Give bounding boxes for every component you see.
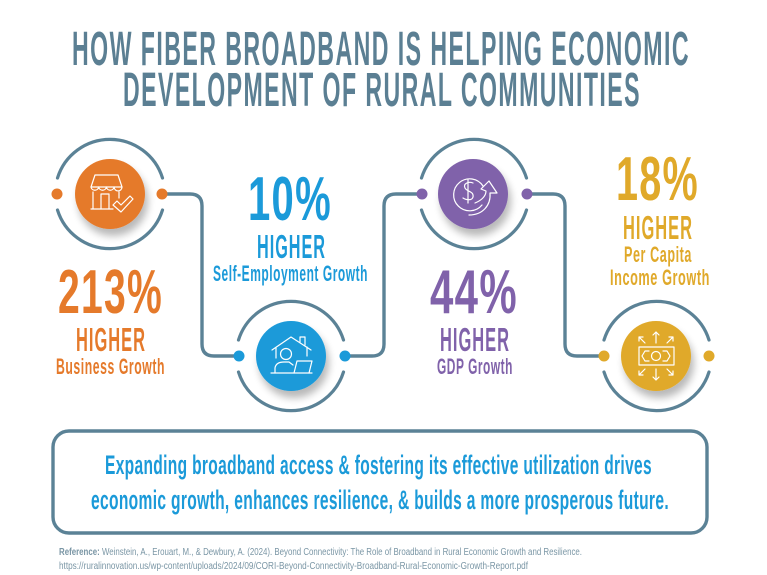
icon: person with laptop at home — [271, 337, 312, 373]
icon: banknote with outward arrows — [639, 332, 674, 380]
step 2: self-employment badge — [234, 301, 350, 411]
stat: 44% GDP growth: HIGHER — [440, 321, 510, 358]
stat: 18% per capita income growth: 18% — [616, 145, 699, 214]
stat: 213% business growth: Business Growth — [56, 354, 165, 379]
stat: 213% business growth — [56, 258, 165, 379]
title — [72, 23, 690, 117]
stat: 10% self-employment growth: Self-Employment Growth — [213, 261, 368, 286]
stat: 10% self-employment growth: 10% — [248, 165, 332, 234]
icon: dollar with rising arrow — [454, 179, 497, 215]
step 4: income growth badge — [598, 301, 714, 411]
step 3: GDP growth badge — [416, 139, 532, 249]
stat: 44% GDP growth: GDP Growth — [437, 354, 513, 379]
stat: 44% GDP growth — [430, 258, 518, 379]
callout box — [53, 431, 707, 533]
stat: 18% per capita income growth — [610, 145, 710, 290]
icon: storefront with check — [91, 175, 133, 212]
stat: 18% per capita income growth: Per Capita — [624, 242, 692, 267]
connector lines — [162, 194, 604, 356]
reference: Reference: Weinstein, A., Erouart, M., & Dewbury, A. (2024). Beyond Connectivity: The Role of Broadband in Rural Economic Growth and Resilience. — [59, 547, 582, 558]
reference: https://ruralinnovation.us/wp-content/uploads/2024/09/CORI-Beyond-Connectivity-Broadband-Rural-Economic-Growth-Report.pdf — [59, 561, 528, 572]
stat: 18% per capita income growth: HIGHER — [623, 209, 693, 246]
stat: 44% GDP growth: 44% — [430, 258, 518, 327]
stat: 10% self-employment growth: HIGHER — [257, 228, 326, 265]
step 1: business growth badge — [52, 139, 168, 249]
reference — [59, 547, 582, 572]
stat: 213% business growth: 213% — [58, 258, 163, 327]
stat: 213% business growth: HIGHER — [76, 321, 146, 358]
stat: 10% self-employment growth — [213, 165, 368, 286]
